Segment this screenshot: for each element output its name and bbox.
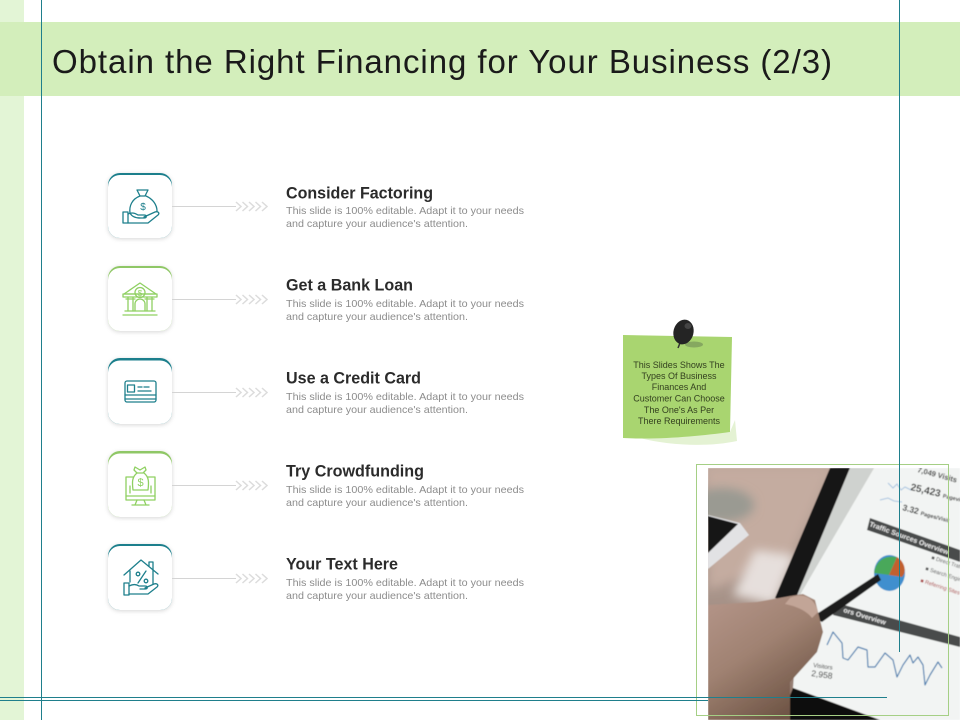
stylus <box>812 574 881 622</box>
photo: hand with stylus on tablet analytics: Traffic Sources Overview <box>868 521 950 557</box>
row 2: bank loan <box>108 266 524 331</box>
connector arrow <box>172 388 267 397</box>
text block <box>286 184 524 230</box>
photo: hand with stylus on tablet analytics: 2,958 <box>811 668 833 681</box>
card: house icon <box>108 544 172 610</box>
card: money bag icon <box>108 173 172 238</box>
text block: Get a Bank Loan <box>286 276 413 294</box>
phone <box>708 515 749 569</box>
note text: There Requirements <box>638 416 721 426</box>
text block: Consider Factoring <box>286 184 433 202</box>
note text: The One's As Per <box>644 405 714 415</box>
text block: This slide is 100% editable. Adapt it to your needs <box>286 205 524 217</box>
photo: hand with stylus on tablet analytics: 3.32 Pages/Visit <box>901 502 951 524</box>
text block: and capture your audience's attention. <box>286 311 468 323</box>
sticky note callout <box>623 317 737 445</box>
text block: and capture your audience's attention. <box>286 590 468 602</box>
note text: Finances And <box>652 382 706 392</box>
card: crowdfunding icon <box>108 451 172 517</box>
title: Obtain the Right Financing for Your Business (2/3) <box>52 43 832 80</box>
text block <box>286 370 524 416</box>
row 5: your text here <box>108 544 524 610</box>
icon: money bag on monitor: $ <box>137 477 144 489</box>
text block: and capture your audience's attention. <box>286 218 468 230</box>
tablet screen <box>793 468 960 720</box>
tablet bezel <box>775 468 850 602</box>
note text <box>633 360 725 426</box>
card: bank icon <box>108 266 172 331</box>
text block: Use a Credit Card <box>286 370 421 388</box>
connector arrow <box>172 295 267 304</box>
left green strip <box>0 0 24 720</box>
title banner <box>0 22 960 96</box>
row 3: credit card <box>108 358 524 424</box>
photo: hand with stylus on tablet analytics: ors Overview <box>842 607 887 627</box>
card: credit card icon <box>108 358 172 424</box>
note text: Customer Can Choose <box>633 394 725 404</box>
note text: Types Of Business <box>641 371 717 381</box>
icon: house on hand <box>124 560 158 595</box>
note text: This Slides Shows The <box>633 360 725 370</box>
text block: This slide is 100% editable. Adapt it to your needs <box>286 391 524 403</box>
connector arrow <box>172 481 267 490</box>
photo: hand with stylus on tablet analytics <box>690 465 960 720</box>
icon: bank: $ <box>138 289 143 298</box>
connector arrow <box>172 202 267 211</box>
photo: hand with stylus on tablet analytics: ■ Referring Sites <box>919 578 960 597</box>
row 4: crowdfunding <box>108 451 524 517</box>
photo frame <box>696 464 948 716</box>
icon: push pin <box>671 317 703 348</box>
text block: Try Crowdfunding <box>286 462 424 480</box>
row 1: consider factoring <box>108 173 524 238</box>
text block <box>286 276 524 323</box>
text block: and capture your audience's attention. <box>286 404 468 416</box>
icon: money bag on hand: $ <box>140 202 146 213</box>
hand <box>708 594 823 720</box>
text block: This slide is 100% editable. Adapt it to your needs <box>286 577 524 589</box>
connector arrow <box>172 574 267 583</box>
text block: and capture your audience's attention. <box>286 497 468 509</box>
text block <box>286 556 524 602</box>
text block: Your Text Here <box>286 556 398 574</box>
icon: credit card <box>125 381 156 402</box>
sparklines <box>888 483 911 490</box>
text block: This slide is 100% editable. Adapt it to your needs <box>286 484 524 496</box>
pie chart <box>874 555 905 591</box>
text block: This slide is 100% editable. Adapt it to your needs <box>286 298 524 310</box>
text block <box>286 462 524 509</box>
photo: hand with stylus on tablet analytics: 7,049 Visits <box>916 465 958 484</box>
line chart <box>827 632 942 685</box>
dark bars on screen <box>867 518 960 562</box>
photo: hand with stylus on tablet analytics: Visitors <box>813 663 833 672</box>
